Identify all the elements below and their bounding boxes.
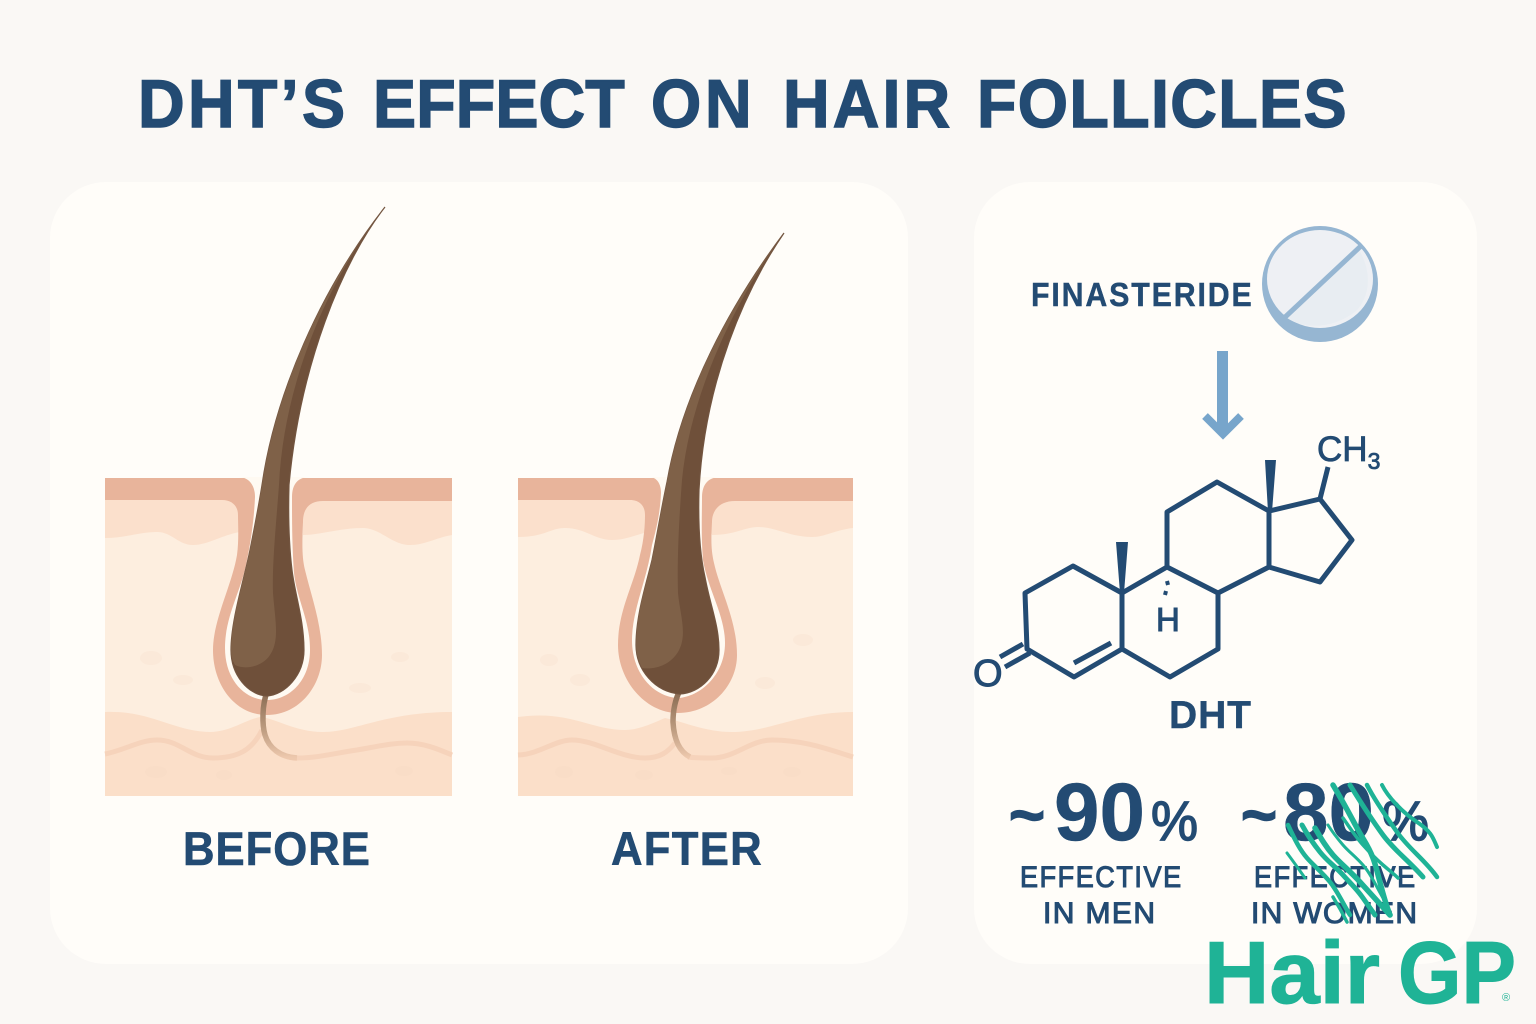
title: DHT’S xyxy=(138,67,345,142)
hash bond xyxy=(1165,581,1168,595)
skin base xyxy=(105,478,452,796)
panel: follicle comparison xyxy=(50,182,908,964)
stereo wedges xyxy=(1116,460,1276,593)
DHT molecule diagram xyxy=(973,430,1380,695)
atom label O: O xyxy=(973,653,1003,695)
logo: Hair GP: GP xyxy=(1398,923,1516,1022)
stat: women: % xyxy=(1382,789,1429,852)
skin spots xyxy=(140,651,413,780)
before label: BEFORE xyxy=(183,823,370,875)
hair shaft and bulb xyxy=(636,233,784,694)
stat: men: EFFECTIVE xyxy=(1020,861,1181,894)
stat: men: 90 xyxy=(1054,767,1145,858)
stat: men: ~ xyxy=(1009,781,1045,850)
lower skin layer xyxy=(518,712,853,796)
hair shaft and bulb xyxy=(231,207,385,696)
hair root stem xyxy=(263,692,297,758)
hair highlight xyxy=(636,233,784,668)
tissue line xyxy=(105,730,452,758)
stat: women xyxy=(1241,767,1429,930)
finasteride label: FINASTERIDE xyxy=(1031,276,1252,313)
stat: men: % xyxy=(1151,789,1198,852)
CH3 group: CH xyxy=(1317,430,1368,469)
after follicle illustration xyxy=(518,233,853,796)
skin base xyxy=(518,478,853,796)
stat: women: IN WOMEN xyxy=(1251,897,1417,930)
title: ON xyxy=(651,67,752,142)
panel: finasteride and DHT xyxy=(973,182,1477,964)
lower skin layer xyxy=(105,712,452,796)
icon: pill xyxy=(1262,226,1378,342)
hair highlight xyxy=(231,207,385,667)
arrow: finasteride to DHT xyxy=(1205,351,1241,434)
skin surface and follicle sheath xyxy=(518,478,853,713)
molecule bonds xyxy=(1000,467,1352,677)
title: FOLLICLES xyxy=(977,67,1347,142)
tissue line xyxy=(518,740,853,758)
follicle channel xyxy=(225,477,310,700)
logo hair strands xyxy=(1287,785,1437,922)
after label: AFTER xyxy=(611,823,762,875)
stat: women: 80 xyxy=(1283,767,1374,858)
follicle channel xyxy=(632,477,725,698)
logo: Hair GP xyxy=(1204,785,1516,1022)
title xyxy=(138,67,1347,142)
logo: Hair GP: ® xyxy=(1502,992,1510,1004)
CH3 group: 3 xyxy=(1368,448,1380,474)
upper skin layer xyxy=(105,495,452,545)
stat: women: ~ xyxy=(1241,781,1277,850)
stat: men xyxy=(1009,767,1198,930)
upper skin layer xyxy=(518,495,853,540)
skin surface and follicle sheath xyxy=(105,478,452,715)
skin spots xyxy=(540,634,813,780)
stat: men: IN MEN xyxy=(1043,897,1155,930)
hair root stem xyxy=(673,690,690,757)
before follicle illustration xyxy=(105,207,452,796)
title: EFFECT xyxy=(373,67,625,142)
stat: women: EFFECTIVE xyxy=(1254,861,1415,894)
atom label H: H xyxy=(1156,601,1180,638)
logo wordmark: Hair xyxy=(1204,923,1380,1022)
DHT label: DHT xyxy=(1169,694,1251,737)
title: HAIR xyxy=(783,67,950,142)
